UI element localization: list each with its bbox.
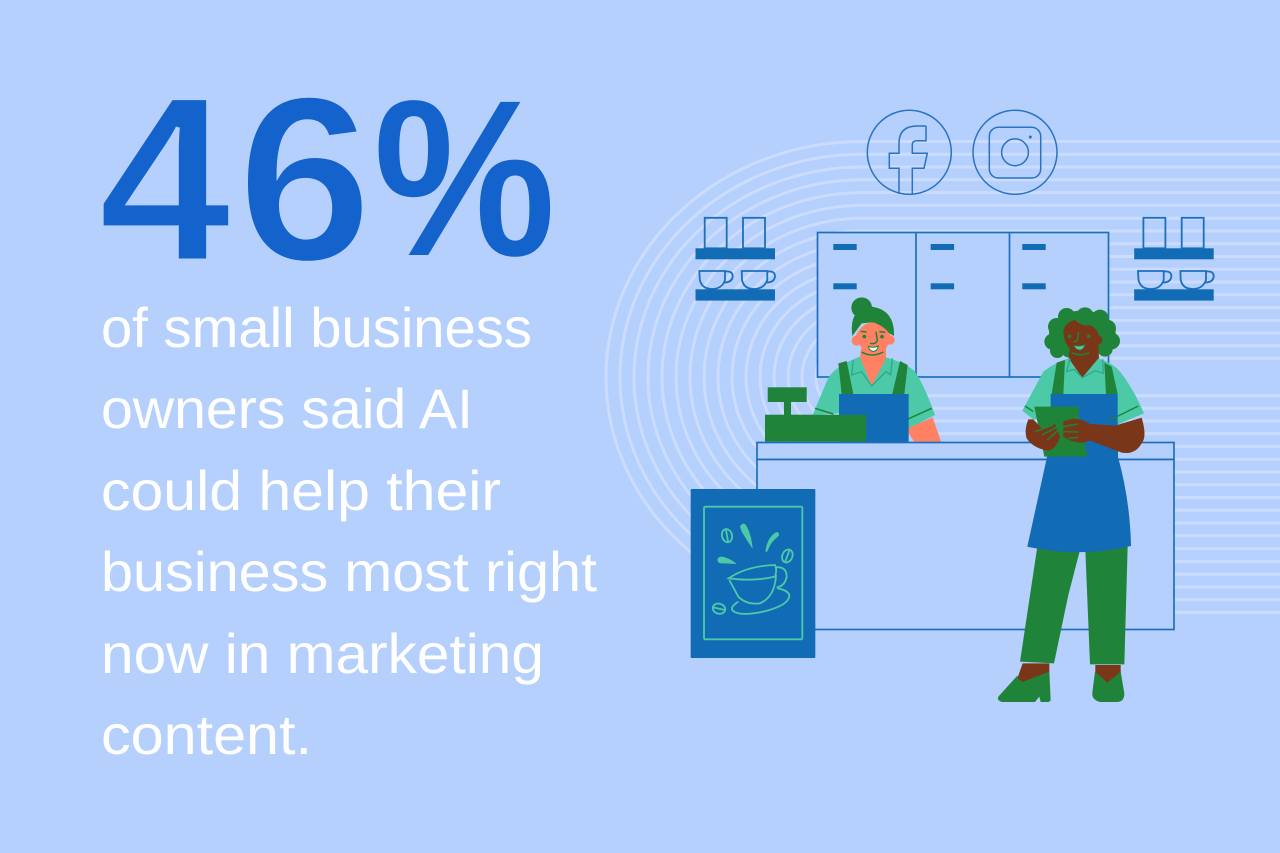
sign: coffee cup [691, 489, 815, 658]
barista standing: lower body [998, 547, 1128, 702]
barista standing: upper body [1022, 307, 1144, 447]
apron bib [1051, 394, 1118, 447]
description text: content. [101, 703, 312, 766]
fingers [1035, 424, 1078, 440]
shirt [1022, 358, 1144, 426]
tablet and arms [1025, 406, 1144, 457]
tablet [1034, 407, 1087, 457]
neck [1069, 345, 1099, 378]
legs [1020, 547, 1128, 664]
face [1093, 335, 1102, 345]
statistic: 46%: 4 [98, 48, 232, 312]
statistic: 46%: 6 [237, 48, 372, 312]
apron [839, 394, 909, 443]
ankles [1017, 663, 1121, 683]
neck [860, 348, 886, 386]
icon: facebook [867, 110, 951, 194]
left arm [1026, 419, 1060, 451]
shirt [813, 357, 935, 429]
description text: could help their [101, 459, 501, 522]
shoes [998, 672, 1051, 702]
counter [757, 442, 1174, 630]
hair [852, 307, 894, 336]
arm [906, 417, 941, 442]
apron skirt [1027, 440, 1131, 552]
face [852, 336, 862, 346]
description text: of small business [101, 296, 532, 359]
cash register [765, 387, 866, 442]
collar lines [852, 358, 892, 386]
hair [1044, 307, 1120, 358]
description text: now in marketing [101, 622, 544, 685]
icon: instagram [973, 110, 1057, 194]
description text [101, 296, 597, 766]
statistic: 46% [98, 48, 556, 312]
statistic: 46%: % [373, 54, 556, 304]
description text: business most right [101, 540, 597, 603]
sleeve crease [1025, 406, 1138, 420]
barista behind counter [813, 297, 941, 443]
shelf: left [696, 218, 775, 301]
shelf: right [1134, 218, 1214, 301]
description text: owners said AI [101, 377, 473, 440]
menu board [818, 232, 1108, 377]
right arm [1063, 418, 1144, 453]
